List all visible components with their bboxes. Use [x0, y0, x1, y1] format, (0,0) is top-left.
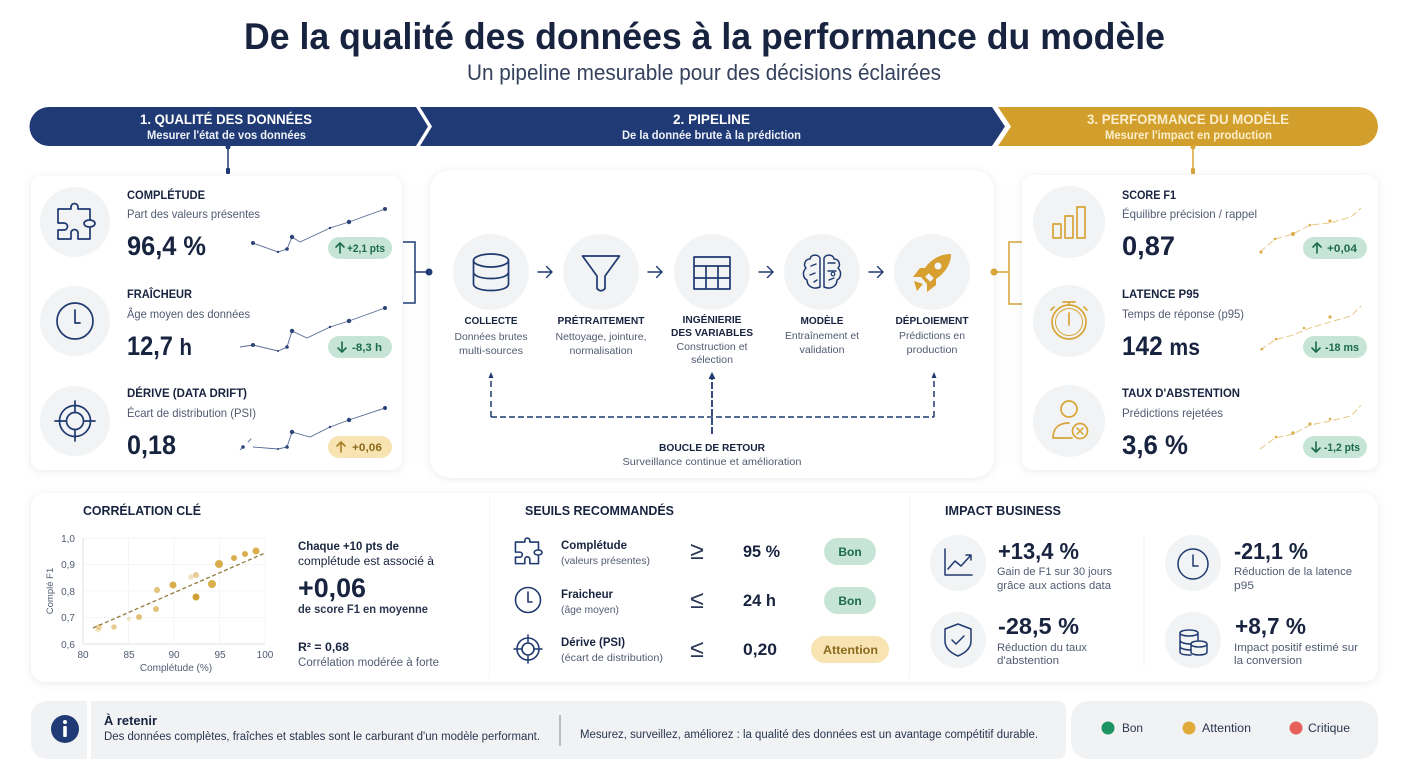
footer: key takeaway: Des données complètes, fraîches et stables sont le carburant d'un modèle performant. — [104, 731, 540, 743]
step: ingénierie des variables: DES VARIABLES — [671, 327, 753, 339]
metric: fraîcheur: Âge moyen des données — [127, 306, 250, 321]
metric: latence P95: 142 ms — [1122, 331, 1200, 361]
step: collecte: Données brutes — [454, 331, 528, 343]
metric: complétude — [40, 187, 392, 261]
step: collecte: COLLECTE — [464, 315, 518, 327]
legend: Attention — [1202, 723, 1251, 735]
banner: 2. pipeline: 2. PIPELINE — [673, 111, 750, 127]
banner: 2. pipeline: De la donnée brute à la prédiction — [622, 130, 801, 142]
metric: dérive: DÉRIVE (DATA DRIFT) — [127, 385, 247, 400]
connector: banner 3 to metrics — [1190, 144, 1196, 174]
banner: 1. qualité des données — [30, 107, 428, 146]
metric: complétude: 96,4 % — [127, 231, 206, 261]
section: seuils recommandés: SEUILS RECOMMANDÉS — [525, 503, 674, 518]
icon: user rejected — [1033, 385, 1105, 457]
threshold row: complétude: ≥ — [690, 537, 704, 565]
threshold row: complétude: 95 % — [743, 543, 780, 561]
feedback loop label — [622, 442, 802, 468]
banner: 3. performance du modèle: Mesurer l'impact en production — [1105, 130, 1272, 142]
threshold row: dérive: (écart de distribution) — [561, 652, 663, 664]
panel: bottom analysis band — [31, 493, 1378, 682]
title: De la qualité des données à la performance du modèle — [244, 16, 1165, 57]
sparkline — [1259, 208, 1361, 254]
connector: banner 1 to metrics — [226, 144, 230, 174]
footer: key takeaway — [31, 701, 1066, 759]
step: modèle — [784, 234, 860, 356]
impact: gain F1 — [930, 535, 1112, 592]
arrow — [869, 266, 883, 278]
scatter chart: 90 — [168, 650, 180, 661]
metric: taux d'abstention: TAUX D'ABSTENTION — [1122, 386, 1240, 400]
impact: conversion: +8,7 % — [1235, 613, 1306, 639]
badge: -8,3 h — [328, 336, 392, 358]
impact: latence: -21,1 % — [1234, 538, 1308, 564]
step: collecte — [453, 234, 529, 357]
feedback loop arrows — [488, 372, 936, 434]
scatter chart: 100 — [257, 650, 274, 661]
metric: fraîcheur — [40, 286, 392, 361]
impact: conversion: la conversion — [1234, 655, 1302, 667]
badge: +0,04: +0,04 — [1327, 243, 1358, 255]
threshold row: complétude: Bon — [838, 545, 862, 559]
icon: info — [51, 715, 79, 743]
impact: latence: p95 — [1234, 580, 1254, 592]
badge: -18 ms — [1303, 336, 1367, 358]
step: ingénierie des variables: sélection — [691, 354, 733, 366]
metric: dérive: 0,18 — [127, 430, 176, 460]
arrow — [538, 266, 552, 278]
scatter chart: 95 — [214, 650, 226, 661]
panel: model performance metrics — [1022, 175, 1378, 470]
metric: taux d'abstention — [1033, 385, 1367, 460]
impact: gain F1: grâce aux actions data — [997, 580, 1112, 592]
banner: 1. qualité des données: 1. QUALITÉ DES DONNÉES — [140, 111, 312, 127]
legend: Critique — [1308, 723, 1350, 735]
threshold row: dérive: Dérive (PSI) — [561, 637, 625, 649]
sparkline — [1260, 306, 1361, 350]
threshold row: fraîcheur — [516, 586, 876, 616]
badge: -1,2 pts: -1,2 pts — [1324, 442, 1360, 454]
correlation commentary — [298, 541, 439, 669]
section: seuils recommandés — [514, 503, 889, 664]
icon: funnel — [563, 234, 639, 310]
scatter chart: 1,0 — [61, 534, 75, 545]
step: ingénierie des variables: INGÉNIERIE — [682, 313, 742, 326]
badge: +0,06: +0,06 — [352, 442, 382, 454]
threshold row: fraîcheur: Fraicheur — [561, 589, 614, 601]
scatter chart: 0,9 — [61, 560, 75, 571]
icon: puzzle — [40, 187, 110, 257]
banner: 3. performance du modèle — [998, 107, 1378, 146]
metric: score F1: SCORE F1 — [1122, 188, 1176, 202]
footer: key takeaway: À retenir — [104, 713, 157, 728]
impact: abstention: Réduction du taux — [997, 642, 1087, 654]
badge: +0,04 — [1303, 237, 1367, 259]
scatter chart: Complétude (%) — [140, 663, 212, 674]
scatter chart: Complé F1 — [45, 568, 56, 614]
metric: dérive — [40, 385, 392, 460]
badge: -1,2 pts — [1303, 436, 1367, 458]
section: corrélation clé: CORRÉLATION CLÉ — [83, 503, 201, 518]
icon: database — [453, 234, 529, 310]
step: modèle: Entraînement et — [785, 330, 859, 342]
metric: taux d'abstention: Prédictions rejetées — [1122, 406, 1223, 420]
impact: abstention: -28,5 % — [998, 613, 1079, 639]
correlation commentary: complétude est associé à — [298, 556, 435, 568]
step: déploiement — [894, 234, 970, 356]
step: prétraitement: normalisation — [570, 345, 633, 357]
correlation commentary: +0,06 — [298, 573, 366, 603]
metric: score F1 — [1033, 186, 1367, 261]
step: déploiement: DÉPLOIEMENT — [896, 314, 969, 327]
arrow — [759, 266, 773, 278]
icon: target — [40, 386, 110, 456]
impact: conversion — [1165, 612, 1358, 668]
metric: latence P95 — [1033, 285, 1367, 361]
icon: brain — [784, 234, 860, 310]
step: modèle: MODÈLE — [800, 314, 844, 327]
section: corrélation clé — [45, 503, 439, 674]
metric: latence P95: Temps de réponse (p95) — [1122, 307, 1244, 321]
scatter chart: 85 — [123, 650, 135, 661]
threshold row: dérive: 0,20 — [743, 641, 777, 659]
bracket: quality to pipeline — [403, 242, 432, 303]
banner: 1. qualité des données: Mesurer l'état de vos données — [147, 130, 306, 142]
scatter chart: 0,7 — [61, 613, 75, 624]
impact: gain F1: Gain de F1 sur 30 jours — [997, 566, 1112, 578]
correlation commentary: Corrélation modérée à forte — [298, 657, 439, 669]
threshold row: dérive: Attention — [823, 643, 878, 657]
sparkline — [251, 207, 387, 253]
section: impact business — [930, 503, 1358, 668]
panel: data quality metrics — [31, 176, 402, 470]
feedback loop label: Surveillance continue et amélioration — [622, 456, 802, 468]
threshold row: fraîcheur: ≤ — [690, 586, 704, 614]
threshold row: fraîcheur: 24 h — [743, 592, 776, 610]
scatter chart: 0,6 — [61, 640, 75, 651]
step: prétraitement — [556, 234, 646, 357]
bracket: pipeline to performance — [990, 242, 1022, 304]
step: ingénierie des variables: Construction et — [676, 341, 748, 353]
badge: +2,1 pts: +2,1 pts — [347, 243, 385, 255]
impact: latence — [1165, 535, 1352, 592]
impact: abstention — [930, 612, 1087, 668]
icon: table — [674, 234, 750, 310]
metric: fraîcheur: FRAÎCHEUR — [127, 286, 192, 301]
threshold row: fraîcheur: (âge moyen) — [561, 604, 619, 616]
scatter chart: 0,8 — [61, 587, 75, 598]
metric: taux d'abstention: 3,6 % — [1122, 430, 1188, 460]
step: ingénierie des variables — [671, 234, 753, 366]
threshold row: fraîcheur: Bon — [838, 594, 862, 608]
scatter chart — [45, 534, 274, 674]
sparkline — [240, 406, 387, 450]
arrow — [648, 266, 662, 278]
step: prétraitement: Nettoyage, jointure, — [556, 331, 646, 343]
footer: key takeaway: Mesurez, surveillez, améliorez : la qualité des données est un avantage compétitif durable. — [580, 729, 1038, 741]
step: déploiement: production — [906, 344, 958, 356]
badge: +0,06 — [328, 436, 392, 458]
legend — [1071, 701, 1378, 759]
badge: -8,3 h: -8,3 h — [352, 342, 382, 354]
icon: bar chart — [1033, 186, 1105, 258]
panel: pipeline — [430, 170, 994, 478]
correlation commentary: de score F1 en moyenne — [298, 604, 428, 616]
threshold row: dérive — [514, 635, 889, 664]
badge: +2,1 pts — [328, 237, 392, 259]
banner: 2. pipeline — [420, 107, 1005, 146]
step: collecte: multi-sources — [459, 345, 523, 357]
feedback loop label: BOUCLE DE RETOUR — [659, 442, 765, 454]
section: impact business: IMPACT BUSINESS — [945, 503, 1061, 518]
impact: abstention: d'abstention — [997, 655, 1059, 667]
metric: fraîcheur: 12,7 h — [127, 331, 192, 361]
impact: latence: Réduction de la latence — [1234, 566, 1352, 578]
impact: conversion: Impact positif estimé sur — [1234, 642, 1358, 654]
correlation commentary: R² = 0,68 — [298, 640, 349, 654]
icon: stopwatch — [1033, 285, 1105, 357]
correlation commentary: Chaque +10 pts de — [298, 541, 399, 553]
threshold row: complétude: Complétude — [561, 540, 627, 552]
sparkline — [1260, 405, 1361, 449]
scatter chart: 80 — [77, 650, 89, 661]
impact: gain F1: +13,4 % — [998, 538, 1079, 564]
metric: score F1: Équilibre précision / rappel — [1122, 206, 1257, 221]
step: prétraitement: PRÉTRAITEMENT — [558, 314, 645, 327]
metric: complétude: COMPLÉTUDE — [127, 187, 205, 202]
badge: -18 ms: -18 ms — [1325, 342, 1359, 354]
legend: Bon — [1122, 723, 1143, 735]
step: déploiement: Prédictions en — [899, 330, 965, 342]
subtitle: Un pipeline mesurable pour des décisions éclairées — [467, 60, 941, 85]
threshold row: complétude — [515, 537, 876, 567]
sparkline — [240, 306, 387, 352]
banner: 3. performance du modèle: 3. PERFORMANCE DU MODÈLE — [1087, 111, 1289, 127]
threshold row: dérive: ≤ — [690, 635, 704, 663]
metric: latence P95: LATENCE P95 — [1122, 287, 1199, 301]
threshold row: complétude: (valeurs présentes) — [561, 555, 650, 567]
step: modèle: validation — [800, 344, 845, 356]
icon: rocket — [894, 234, 970, 310]
metric: complétude: Part des valeurs présentes — [127, 207, 260, 221]
metric: score F1: 0,87 — [1122, 231, 1175, 261]
metric: dérive: Écart de distribution (PSI) — [127, 405, 256, 420]
icon: clock — [40, 286, 110, 356]
